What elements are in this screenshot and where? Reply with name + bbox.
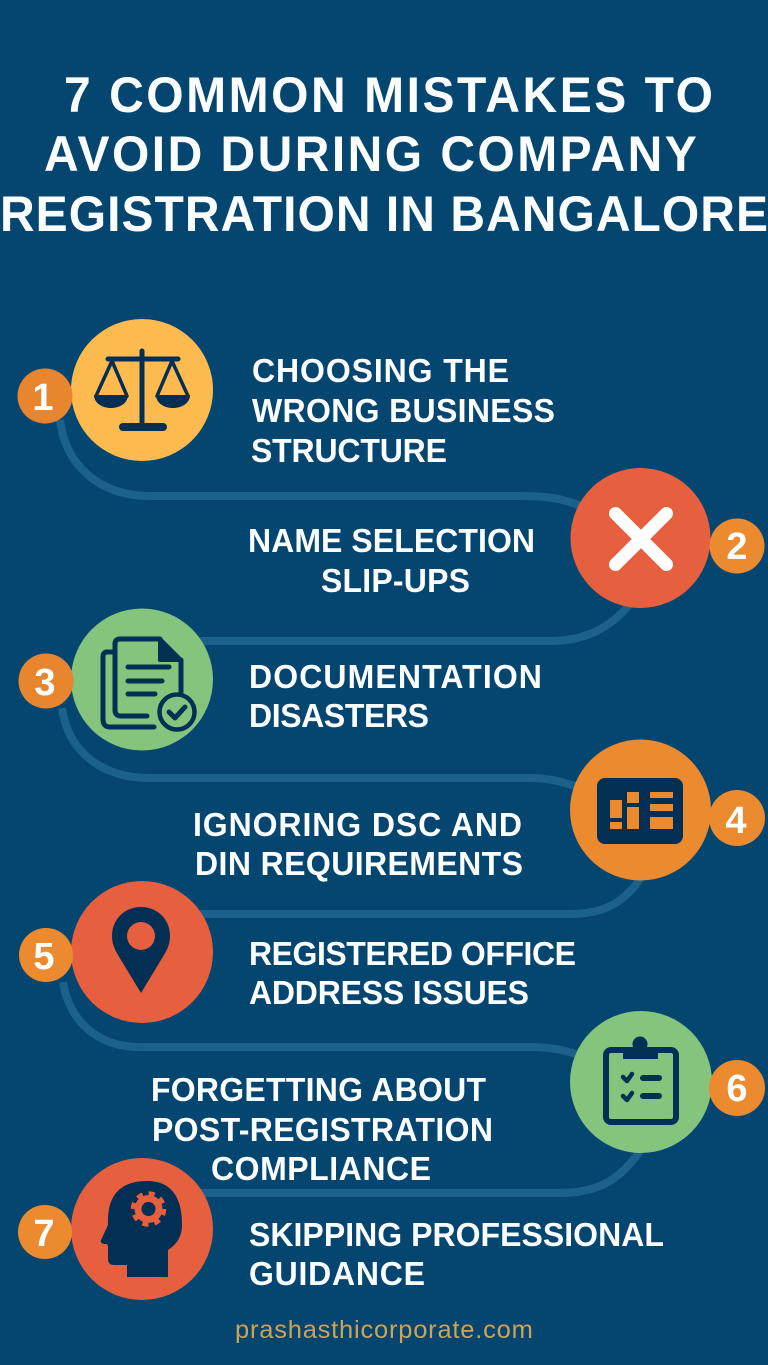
arrow: connector 2 to 3 xyxy=(200,604,630,641)
icon: clipboard checklist xyxy=(570,1011,712,1153)
panel: step 1 xyxy=(18,319,555,469)
text: step 3 xyxy=(249,659,542,734)
panel: step 3 xyxy=(18,608,542,750)
number badge 5: 5 xyxy=(33,936,55,978)
icon: documents with check xyxy=(71,608,213,750)
panel: step 5 xyxy=(19,881,576,1023)
icon: cross mark xyxy=(570,468,710,608)
text: step 7: GUIDANCE xyxy=(249,1256,425,1292)
text: step 4: DIN REQUIREMENTS xyxy=(195,846,523,882)
text: step 3: DOCUMENTATION xyxy=(249,659,542,695)
icon: location pin xyxy=(71,881,213,1023)
text: step 5: REGISTERED OFFICE xyxy=(249,936,576,972)
text: step 7: SKIPPING PROFESSIONAL xyxy=(249,1217,664,1253)
number badge 7 xyxy=(18,1205,72,1259)
number badge 6: 6 xyxy=(726,1068,748,1110)
text: step 2: NAME SELECTION xyxy=(248,523,535,559)
title xyxy=(0,68,768,242)
text: step 6: COMPLIANCE xyxy=(211,1151,431,1187)
arrow: connector 5 to 6 xyxy=(63,982,585,1057)
text: step 1: CHOOSING THE xyxy=(252,353,509,389)
number badge 3 xyxy=(18,654,74,708)
number badge 4 xyxy=(709,790,765,846)
number badge 6 xyxy=(709,1060,765,1116)
text: step 1: WRONG BUSINESS xyxy=(252,393,555,429)
number badge 2 xyxy=(710,518,764,574)
text: step 7 xyxy=(249,1217,664,1292)
text: step 4: IGNORING DSC AND xyxy=(193,807,522,843)
text: step 6: FORGETTING ABOUT xyxy=(151,1072,486,1108)
panel: step 4 xyxy=(193,740,765,882)
panel: step 6 xyxy=(151,1011,765,1187)
text: step 1 xyxy=(251,353,555,469)
text: step 1: STRUCTURE xyxy=(251,433,447,469)
number badge 7: 7 xyxy=(33,1213,55,1255)
text: step 5 xyxy=(249,936,576,1011)
number badge 4: 4 xyxy=(725,800,747,842)
text: step 2: SLIP-UPS xyxy=(321,563,470,599)
text: step 6: POST-REGISTRATION xyxy=(152,1112,493,1148)
number badge 1 xyxy=(18,368,72,424)
title: AVOID DURING COMPANY xyxy=(44,127,697,182)
arrow: connector 3 to 4 xyxy=(62,708,585,790)
arrow: connector 1 to 2 xyxy=(60,420,590,510)
title: REGISTRATION IN BANGALORE xyxy=(0,187,768,242)
number badge 2: 2 xyxy=(726,526,748,568)
text: step 3: DISASTERS xyxy=(249,698,429,734)
arrow: connector 4 to 5 xyxy=(200,876,642,914)
text: step 6 xyxy=(151,1072,493,1187)
panel: step 7 xyxy=(18,1158,664,1300)
text: step 5: ADDRESS ISSUES xyxy=(249,975,529,1011)
number badge 5 xyxy=(19,928,73,982)
icon: head with gear xyxy=(71,1158,213,1300)
number badge 3: 3 xyxy=(34,662,56,704)
number badge 1: 1 xyxy=(32,377,54,419)
text: step 4 xyxy=(193,807,523,882)
arrow: connector 6 to 7 xyxy=(200,1148,642,1193)
footer website: prashasthicorporate.com xyxy=(235,1316,533,1344)
icon: scales of justice xyxy=(71,319,213,461)
title: 7 COMMON MISTAKES TO xyxy=(64,68,713,123)
icon: identification card panel xyxy=(570,740,711,880)
panel: step 2 xyxy=(248,468,764,608)
text: step 2 xyxy=(248,523,535,599)
